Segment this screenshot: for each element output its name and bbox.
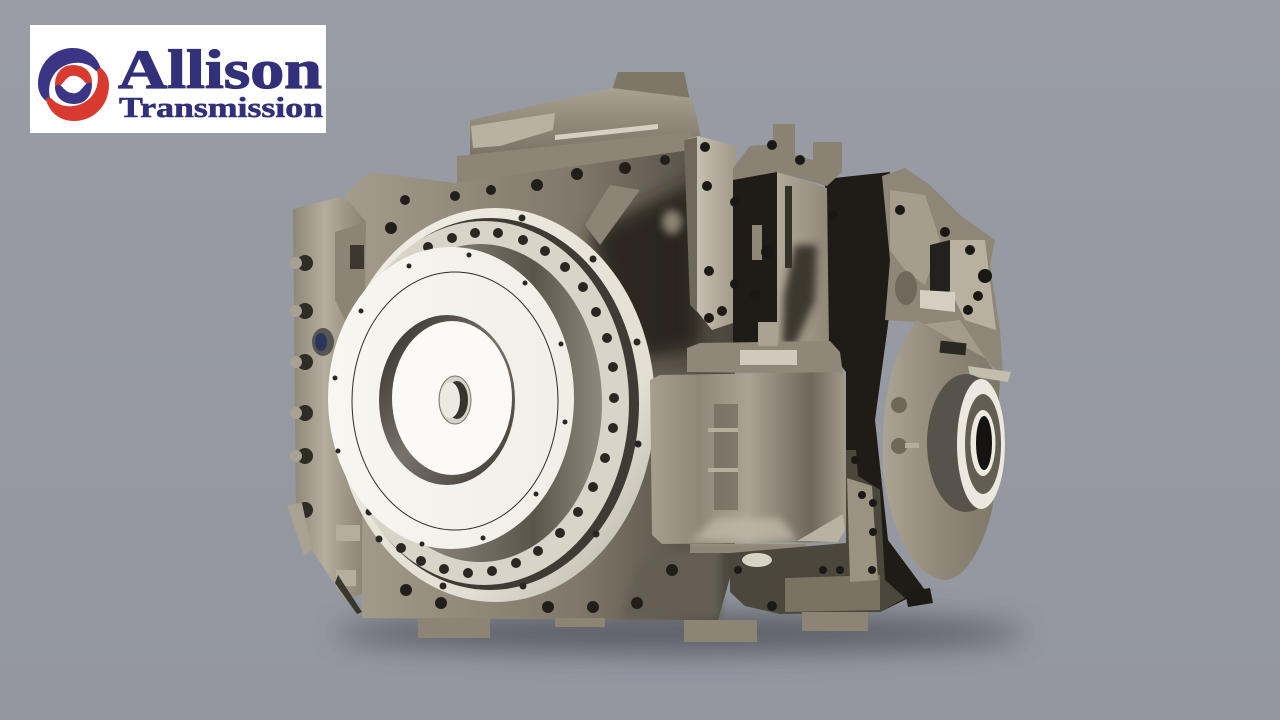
dark column behind gearbox (825, 172, 925, 612)
logo wordmark: Allison: Allison (118, 39, 322, 100)
logo background (30, 25, 326, 133)
lower valve block (730, 450, 933, 614)
front disc (328, 247, 574, 549)
housing shading (585, 180, 720, 618)
main rotor flange (328, 208, 655, 602)
mounting feet (418, 612, 868, 642)
main housing (344, 150, 735, 620)
flange holes (366, 214, 642, 590)
left side plate with bolts (287, 197, 372, 614)
ground shadow (335, 613, 1025, 653)
disc holes (332, 252, 568, 546)
output flange (927, 374, 1005, 512)
connector: blue plug (312, 328, 334, 356)
central valve block (730, 124, 842, 345)
ring bolts (396, 228, 619, 578)
housing bolts (385, 155, 678, 613)
transmission unit (287, 72, 1011, 642)
dark recessed ring (379, 315, 515, 485)
part number engraving (785, 186, 792, 268)
gearbox cover (883, 320, 1011, 580)
disc scribed circle (352, 272, 558, 530)
top cap block (457, 72, 704, 188)
logo emblem (38, 48, 109, 121)
right gearbox upper housing (882, 168, 1003, 380)
logo: Allison Transmission (30, 25, 326, 133)
centre hub (439, 376, 471, 424)
hydraulic canister (650, 322, 846, 553)
right side plate (684, 136, 736, 330)
logo wordmark: Transmission: Transmission (119, 93, 324, 124)
